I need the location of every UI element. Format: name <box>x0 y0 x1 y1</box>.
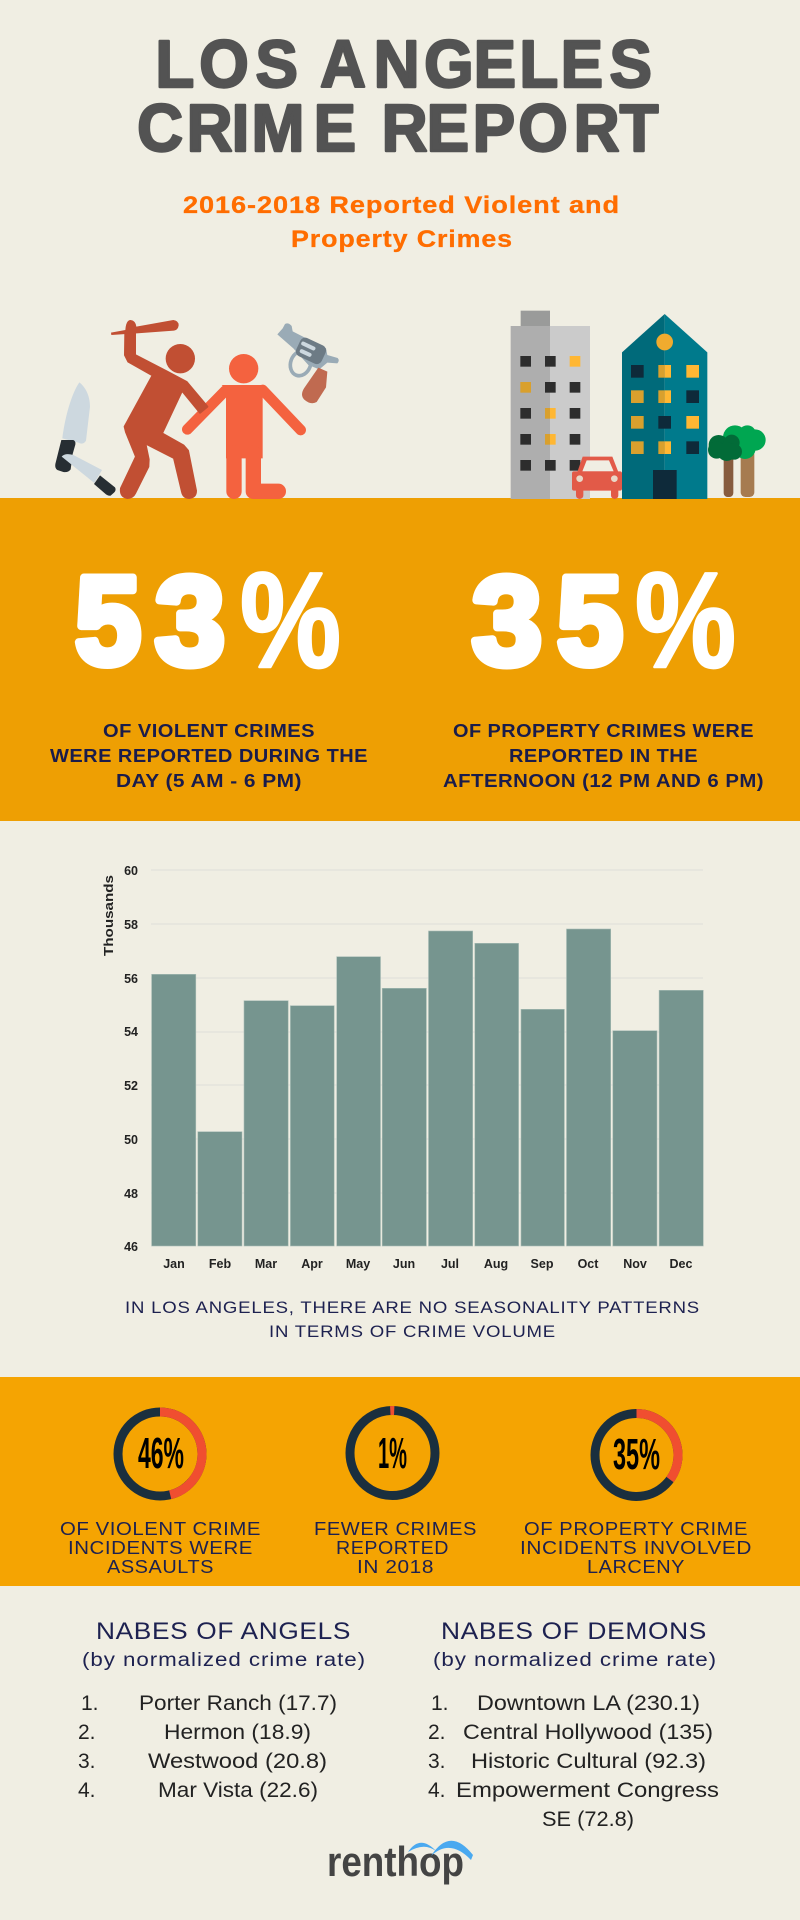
list: nabes of demons: SE (72.8) <box>542 1808 634 1831</box>
list: nabes of demons: 3. <box>428 1750 446 1773</box>
donut: 1 percent fewer crimes: 1% <box>378 1429 407 1478</box>
stat: 35 percent property crimes: 5 <box>557 552 623 691</box>
month labels: Apr <box>301 1257 323 1271</box>
icon: knives <box>55 382 116 496</box>
stat: 35 percent property crimes <box>443 544 764 791</box>
month labels: Aug <box>484 1257 508 1271</box>
y axis labels <box>124 864 138 1254</box>
stat: 53 percent violent crimes: 5 <box>75 552 141 691</box>
title: CRIME REPORT <box>137 91 659 165</box>
title <box>137 27 659 165</box>
chart caption <box>125 1299 700 1341</box>
month labels: Jan <box>163 1257 185 1271</box>
stat: 53 percent violent crimes: WERE REPORTED DURING THE <box>50 746 368 766</box>
y axis title: Thousands <box>102 875 116 956</box>
list: nabes of angels: 1. <box>81 1692 99 1715</box>
list: nabes of demons: Central Hollywood (135) <box>463 1721 713 1744</box>
icon: victim figure <box>187 354 301 491</box>
icon: red car <box>572 457 622 499</box>
donut: 46 percent assaults <box>60 1412 261 1577</box>
donut: 35 percent larceny: 35% <box>613 1430 660 1479</box>
donut: 1 percent fewer crimes: FEWER CRIMES <box>314 1519 477 1539</box>
month labels: Sep <box>531 1257 554 1271</box>
subtitle <box>183 192 620 253</box>
month labels: Oct <box>578 1257 599 1271</box>
chart caption: IN TERMS OF CRIME VOLUME <box>269 1323 556 1341</box>
list: nabes of demons: Historic Cultural (92.3) <box>471 1750 706 1773</box>
y axis labels: 60 <box>124 864 138 878</box>
month labels: May <box>346 1257 370 1271</box>
stat: 53 percent violent crimes: OF VIOLENT CRIMES <box>103 721 315 741</box>
list: nabes of angels: NABES OF ANGELS <box>96 1618 351 1645</box>
illustration: city buildings, car and trees <box>511 311 766 499</box>
list: nabes of angels: 2. <box>78 1721 96 1744</box>
list: nabes of angels: 3. <box>78 1750 96 1773</box>
list: nabes of demons: 1. <box>431 1692 449 1715</box>
list: nabes of demons: (by normalized crime rate) <box>433 1650 717 1671</box>
list: nabes of demons: Empowerment Congress <box>456 1779 719 1802</box>
donut: 1 percent fewer crimes: REPORTED <box>336 1538 449 1558</box>
month labels: Feb <box>209 1257 231 1271</box>
month labels: Mar <box>255 1257 277 1271</box>
list: nabes of angels: Hermon (18.9) <box>164 1721 311 1744</box>
month labels: Nov <box>623 1257 647 1271</box>
donut: 46 percent assaults: ASSAULTS <box>107 1557 214 1577</box>
bars <box>152 929 703 1246</box>
icon: attacker with bat <box>111 320 207 498</box>
month labels: Jul <box>441 1257 459 1271</box>
y axis labels: 50 <box>124 1133 138 1147</box>
subtitle: 2016-2018 Reported Violent and <box>183 192 620 219</box>
list: nabes of demons: 4. <box>428 1779 446 1802</box>
y axis labels: 52 <box>124 1079 138 1093</box>
title: LOS ANGELES <box>155 27 652 101</box>
donut: 46 percent assaults: 46% <box>138 1429 184 1478</box>
stat: 35 percent property crimes: REPORTED IN THE <box>509 746 698 766</box>
donut: 35 percent larceny: INCIDENTS INVOLVED <box>520 1538 752 1558</box>
logo: renthop: renthop <box>327 1838 464 1885</box>
stat: 53 percent violent crimes: 3 <box>155 552 225 691</box>
list: nabes of demons: Downtown LA (230.1) <box>477 1692 700 1715</box>
y axis labels: 56 <box>124 972 138 986</box>
stat: 35 percent property crimes: 3 <box>472 552 542 691</box>
stat: 53 percent violent crimes <box>50 544 368 791</box>
y axis labels: 58 <box>124 918 138 932</box>
month labels: Dec <box>670 1257 693 1271</box>
stat: 35 percent property crimes: AFTERNOON (12 PM AND 6 PM) <box>443 771 764 791</box>
month labels: Jun <box>393 1257 415 1271</box>
bar chart: monthly crime volume <box>102 864 703 1271</box>
donut: 1 percent fewer crimes <box>314 1408 477 1577</box>
subtitle: Property Crimes <box>291 226 513 253</box>
month labels <box>163 1257 693 1271</box>
list: nabes of angels: 4. <box>78 1779 96 1802</box>
chart caption: IN LOS ANGELES, THERE ARE NO SEASONALITY PATTERNS <box>125 1299 700 1317</box>
y axis labels: 46 <box>124 1240 138 1254</box>
list: nabes of angels: Westwood (20.8) <box>148 1750 327 1773</box>
stat: 53 percent violent crimes: % <box>240 544 341 696</box>
panel: headline stats <box>0 498 800 821</box>
stat: 53 percent violent crimes: DAY (5 AM - 6 PM) <box>116 771 302 791</box>
icon: revolver <box>277 323 339 403</box>
illustration: crime figures and weapons <box>55 320 339 498</box>
stat: 35 percent property crimes: % <box>635 544 736 696</box>
y axis labels: 48 <box>124 1187 138 1201</box>
panel: donut stats <box>0 1377 800 1586</box>
list: nabes of angels: Mar Vista (22.6) <box>158 1779 318 1802</box>
list: nabes of angels: Porter Ranch (17.7) <box>139 1692 337 1715</box>
icon: teal building <box>622 314 707 499</box>
donut: 1 percent fewer crimes: IN 2018 <box>357 1557 434 1577</box>
list: nabes of demons: 2. <box>428 1721 446 1744</box>
list: nabes of angels: (by normalized crime rate) <box>82 1650 366 1671</box>
stat: 35 percent property crimes: OF PROPERTY CRIMES WERE <box>453 721 754 741</box>
donut: 35 percent larceny: OF PROPERTY CRIME <box>524 1519 748 1539</box>
donut: 46 percent assaults: OF VIOLENT CRIME <box>60 1519 261 1539</box>
list: nabes of demons: NABES OF DEMONS <box>441 1618 707 1645</box>
donut: 35 percent larceny: LARCENY <box>587 1557 685 1577</box>
icon: trees <box>708 425 766 497</box>
donut: 46 percent assaults: INCIDENTS WERE <box>68 1538 253 1558</box>
donut: 35 percent larceny <box>520 1414 752 1577</box>
list: nabes of angels <box>78 1618 366 1802</box>
y axis labels: 54 <box>124 1025 138 1039</box>
list: nabes of demons <box>428 1618 719 1831</box>
icon: grey tower <box>511 311 590 499</box>
